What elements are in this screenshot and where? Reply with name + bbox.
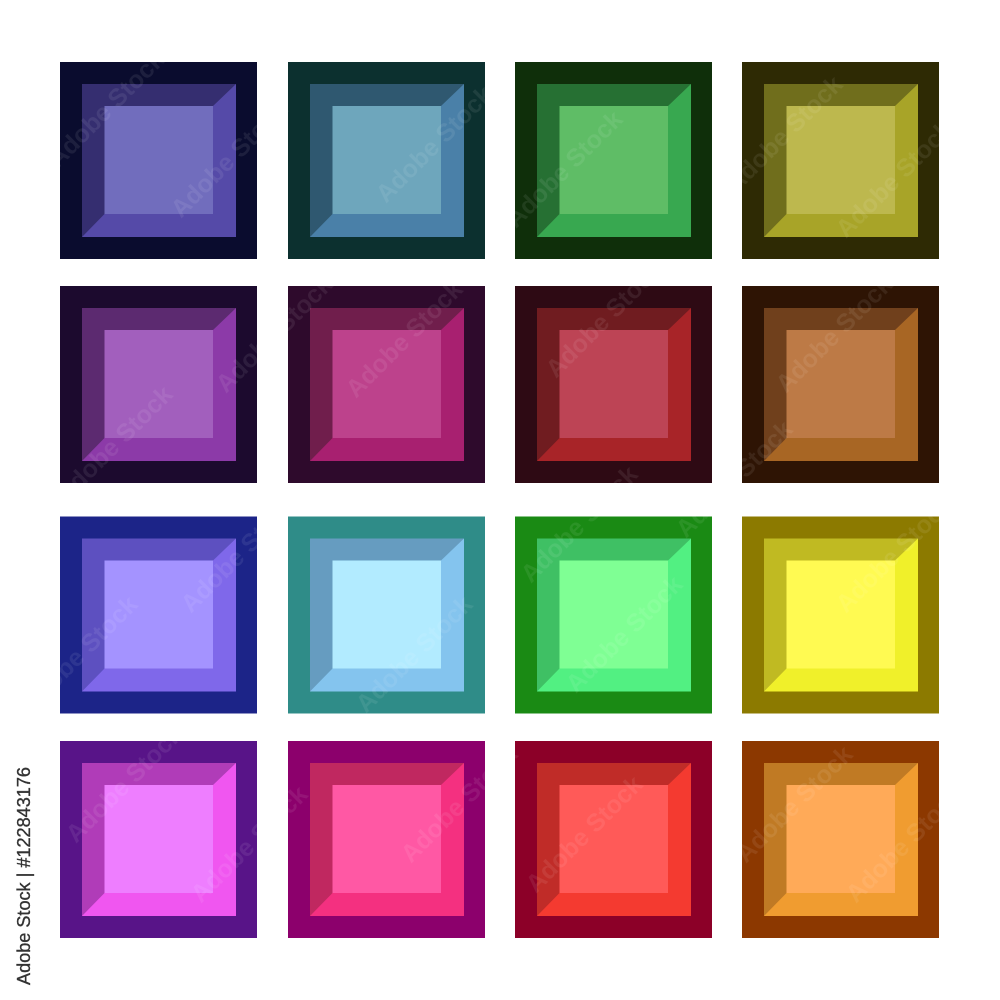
watermarks: Adobe Stock	[340, 275, 468, 403]
watermarks: Adobe Stock	[395, 740, 523, 868]
watermarks: Adobe Stock	[500, 105, 628, 233]
tile: navy	[60, 62, 257, 259]
tile: bright yellow	[742, 516, 939, 714]
tile: bright red	[515, 741, 712, 938]
watermarks: Adobe Stock	[720, 70, 848, 198]
watermarks: Adobe Stock	[370, 80, 498, 208]
tile: bright orange	[742, 741, 939, 938]
watermarks: Adobe Stock	[830, 490, 958, 618]
watermarks: Adobe Stock	[175, 490, 303, 618]
tile: olive	[742, 62, 939, 259]
watermarks: Adobe Stock	[50, 380, 178, 508]
tile: bright violet	[60, 741, 257, 938]
watermarks: Adobe Stock	[210, 270, 338, 398]
watermarks: Adobe Stock	[60, 720, 188, 848]
watermarks: Adobe Stock	[42, 45, 170, 173]
watermarks: Adobe Stock	[830, 115, 958, 243]
watermarks: Adobe Stock	[515, 460, 643, 588]
watermarks: Adobe Stock	[770, 270, 898, 398]
watermarks: Adobe Stock	[840, 780, 968, 908]
tile: bright blue	[60, 516, 257, 714]
stock id label: Adobe Stock | #122843176	[14, 767, 34, 985]
tile: dark red	[515, 286, 712, 483]
watermarks: Adobe Stock	[540, 255, 668, 383]
tile: bright cyan	[288, 516, 485, 714]
watermarks: Adobe Stock	[520, 770, 648, 898]
tile: dark purple	[60, 286, 257, 483]
watermarks: Adobe Stock	[670, 415, 798, 543]
tile: dark green	[515, 62, 712, 259]
watermarks: Adobe Stock	[350, 590, 478, 718]
watermarks: Adobe Stock	[185, 780, 313, 908]
watermarks: Adobe Stock	[560, 570, 688, 698]
tile: dark teal	[288, 62, 485, 259]
tile: bright green	[515, 516, 712, 714]
tile: brown	[742, 286, 939, 483]
tile: bright pink	[288, 741, 485, 938]
watermarks: Adobe Stock	[730, 740, 858, 868]
watermarks: Adobe Stock	[165, 95, 293, 223]
tile: dark magenta	[288, 286, 485, 483]
watermarks: Adobe Stock	[15, 590, 143, 718]
